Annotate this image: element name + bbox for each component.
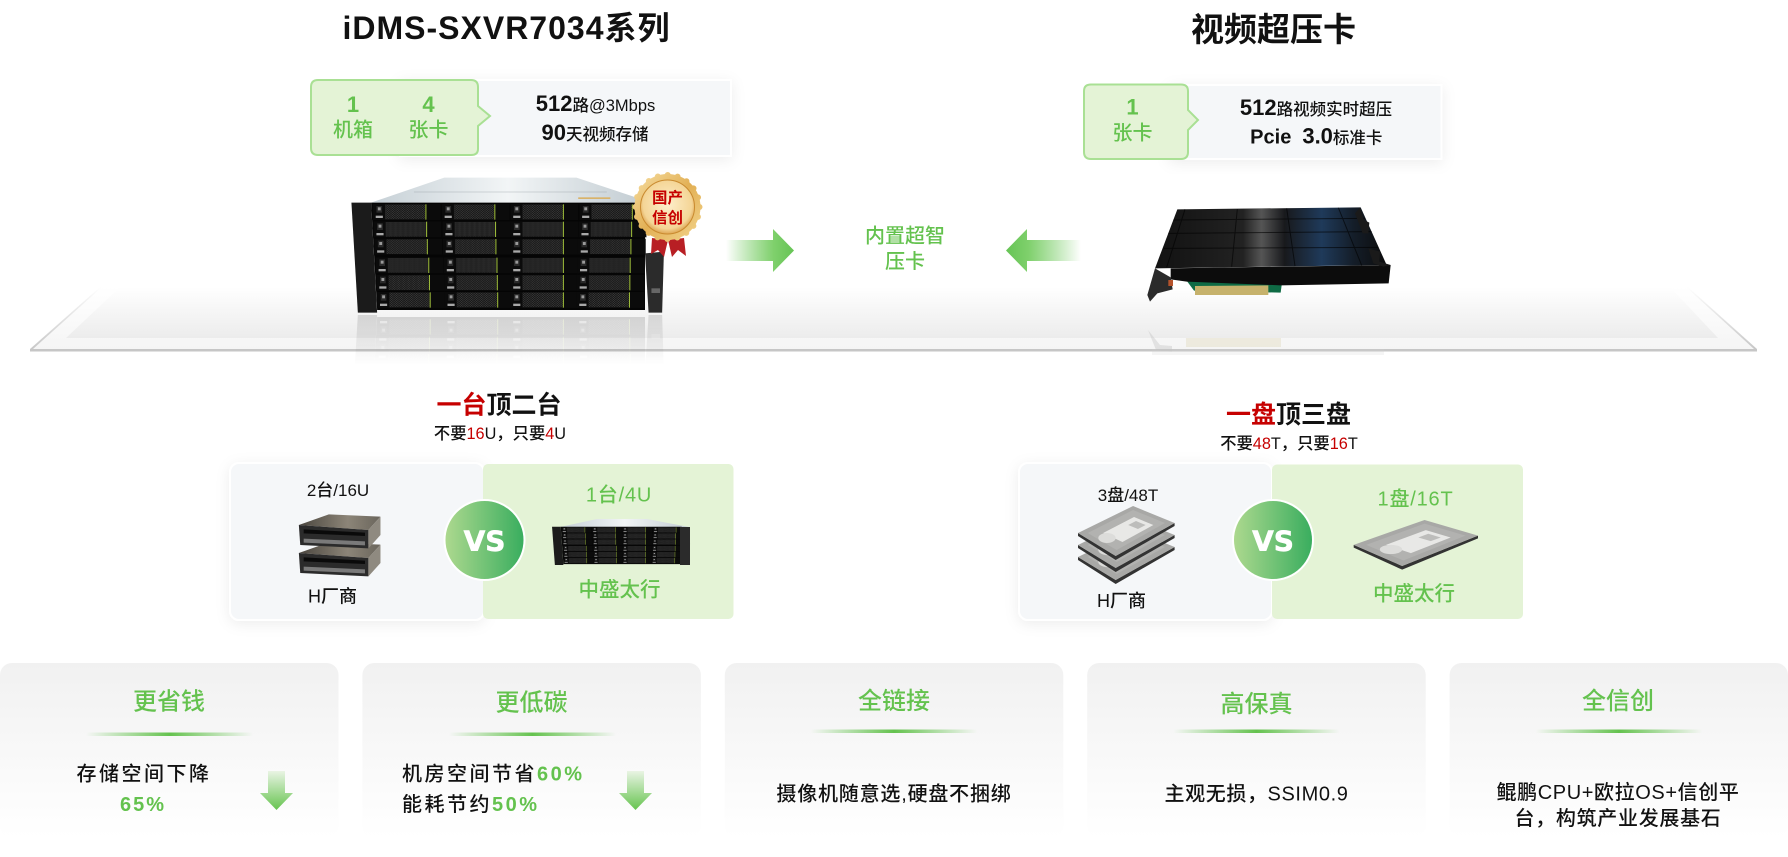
panel: lower carbon — [362, 663, 701, 838]
panel: saves money: 更省钱 — [133, 688, 205, 716]
callout: chassis and cards: 机箱 — [333, 118, 373, 142]
panel: unit comparison — [230, 463, 734, 620]
title: video super-compression card: 视频超压卡 — [1191, 11, 1356, 48]
vendor H side: 2台/16U — [307, 480, 369, 500]
spec text: Pcie 3.0标准卡 — [1250, 124, 1382, 148]
panel: full connectivity: 摄像机随意选,硬盘不捆绑 — [776, 782, 1012, 806]
vendor H side: H厂商 — [1097, 591, 1146, 611]
spec text: 512路视频实时超压 — [1240, 95, 1392, 120]
platform — [30, 287, 1757, 352]
heading: one disk equals three: 不要48T，只要16T — [1220, 435, 1358, 453]
VS badge: VS — [464, 524, 505, 558]
ZSTH side: 1盘/16T — [1378, 488, 1453, 510]
callout: chassis and cards — [311, 80, 490, 155]
badge: domestic innovation medal — [634, 174, 700, 257]
spec text — [536, 91, 655, 145]
heading: one disk equals three: 一盘顶三盘 — [1226, 401, 1351, 429]
panel: full domestic innovation: 台，构筑产业发展基石 — [1514, 807, 1722, 830]
panel: full connectivity — [725, 663, 1063, 838]
icon: server — [552, 519, 690, 565]
VS badge: VS — [1252, 524, 1294, 558]
title: iDMS-SXVR7034 series: iDMS-SXVR7034系列 — [342, 10, 670, 46]
PCIe card image — [1147, 207, 1391, 302]
panel: saves money: 65% — [120, 794, 166, 816]
ZSTH side — [483, 464, 734, 619]
panel: high fidelity — [1087, 663, 1426, 838]
heading: one unit equals two: 一台顶二台 — [436, 390, 562, 420]
spec text: 90天视频存储 — [542, 120, 648, 145]
panel: high fidelity: 主观无损，SSIM0.9 — [1165, 782, 1348, 806]
ZSTH side — [1272, 464, 1523, 619]
panel: lower carbon: 更低碳 — [496, 690, 568, 716]
VS badge — [1233, 500, 1313, 580]
vendor H side — [230, 463, 484, 620]
callout: one card — [1084, 84, 1198, 159]
panel: saves money: 存储空间下降 — [76, 762, 212, 786]
ZSTH side: 中盛太行 — [1373, 582, 1455, 606]
text: built-in super-smart card: 内置超智 — [865, 224, 945, 248]
arrow: left — [1006, 229, 1081, 272]
text: built-in super-smart card — [865, 224, 945, 273]
server reflection — [356, 315, 663, 353]
panel: card specs — [1084, 84, 1442, 159]
panel: full domestic innovation — [1450, 663, 1788, 838]
spec text — [1240, 95, 1392, 148]
callout: one card: 1 — [1126, 94, 1139, 120]
panel: full domestic innovation: 鲲鹏CPU+欧拉OS+信创平 — [1497, 781, 1739, 804]
server image — [351, 178, 664, 313]
callout: chassis and cards: 4 — [422, 92, 435, 117]
vendor H side: H厂商 — [308, 586, 357, 606]
panel: saves money — [0, 663, 338, 838]
heading: one unit equals two: 不要16U，只要4U — [434, 425, 566, 443]
panel: server specs — [311, 80, 731, 156]
panel: high fidelity: 高保真 — [1220, 691, 1292, 718]
icon: down arrow — [619, 771, 652, 810]
VS badge — [444, 500, 524, 580]
ZSTH side: 1台/4U — [586, 484, 652, 506]
panel: lower carbon: 能耗节约50% — [402, 793, 540, 816]
arrow: right — [726, 229, 794, 272]
icon: stacked hard disks — [1078, 506, 1175, 584]
panel: full domestic innovation: 全信创 — [1582, 688, 1654, 715]
vendor H side — [1019, 463, 1272, 620]
spec background — [400, 80, 731, 156]
callout: chassis and cards: 张卡 — [408, 118, 448, 142]
callout: one card: 张卡 — [1112, 122, 1152, 144]
panel: disk comparison — [1019, 463, 1523, 620]
icon: hard disk — [1354, 520, 1478, 570]
panel: full connectivity: 全链接 — [858, 688, 930, 715]
badge: domestic innovation medal: 国产 — [652, 189, 683, 207]
vendor H side: 3盘/48T — [1098, 486, 1158, 505]
icon: stacked servers — [299, 514, 380, 576]
callout: chassis and cards: 1 — [347, 92, 359, 117]
badge: domestic innovation medal: 信创 — [652, 209, 683, 227]
icon: down arrow — [260, 771, 293, 810]
spec background — [1170, 85, 1442, 159]
spec text: 512路@3Mbps — [536, 91, 655, 116]
card reflection — [1148, 330, 1384, 355]
panel: lower carbon: 机房空间节省60% — [402, 762, 585, 786]
text: built-in super-smart card: 压卡 — [885, 250, 925, 273]
ZSTH side: 中盛太行 — [578, 578, 660, 602]
heading: one unit equals two — [434, 390, 566, 443]
heading: one disk equals three — [1220, 401, 1358, 453]
